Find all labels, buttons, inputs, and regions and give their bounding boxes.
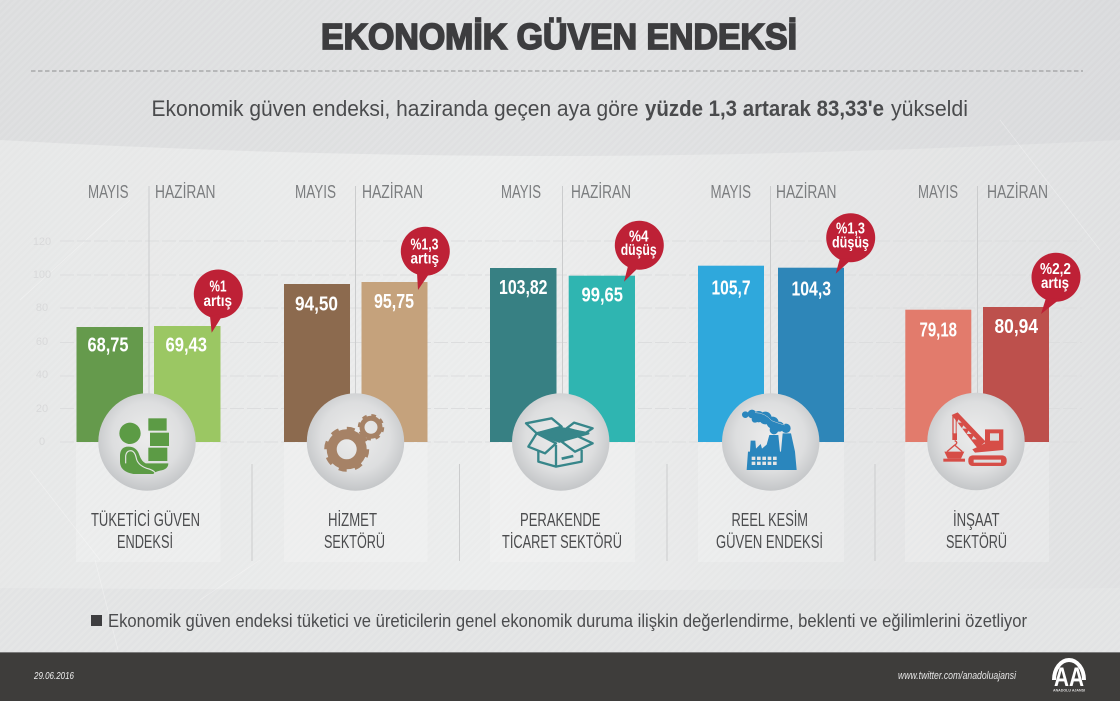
icon: factory <box>722 393 819 491</box>
category label: ENDEKSİ <box>117 532 173 552</box>
subtitle <box>152 96 968 121</box>
category label: SEKTÖRÜ <box>324 532 385 552</box>
column headers <box>918 182 1048 202</box>
y axis labels: 120 <box>33 236 51 248</box>
category label: TİCARET SEKTÖRÜ <box>502 532 622 552</box>
bar: mayıs 68,75 <box>76 327 143 442</box>
category label <box>324 510 385 552</box>
bar: mayıs 105,7: 105,7 <box>712 277 750 299</box>
callout: %1,3 artış: %1,3 <box>410 236 439 253</box>
callout: %2,2 artış <box>1032 253 1080 314</box>
title: EKONOMİK GÜVEN ENDEKSİ <box>321 16 797 57</box>
logo: anadolu ajansı: ANADOLU AJANSI <box>1053 688 1085 692</box>
bar: haziran 99,65 <box>569 276 635 442</box>
panel: hizmet sektörü <box>284 182 450 552</box>
bar: haziran 69,43 <box>154 326 220 442</box>
column headers <box>295 182 423 202</box>
y axis labels <box>33 236 51 448</box>
column headers: MAYIS <box>918 182 958 202</box>
panel: inşaat sektörü <box>905 182 1080 552</box>
bar: mayıs 105,7 <box>698 266 764 442</box>
category label: GÜVEN ENDEKSİ <box>716 532 823 552</box>
bottom note: Ekonomik güven endeksi tüketici ve üreticilerin genel ekonomik duruma ilişkin değerlendirme, beklenti ve eğilimlerini özetliyor <box>108 611 1027 631</box>
logo: anadolu ajansı: AA <box>1054 662 1084 692</box>
bar: haziran 104,3 <box>778 268 844 442</box>
column headers: HAZİRAN <box>776 182 836 202</box>
bar: haziran 95,75 <box>362 282 428 442</box>
callout: %1 artış: %1 <box>210 279 227 296</box>
column headers: MAYIS <box>710 182 751 202</box>
callout: %4 düşüş: düşüş <box>621 242 657 259</box>
bar: haziran 104,3: 104,3 <box>792 279 831 301</box>
subtitle: yüzde 1,3 artarak 83,33'e <box>645 96 884 121</box>
callout: %4 düşüş: %4 <box>629 229 649 246</box>
callout: %1,3 düşüş <box>826 213 875 274</box>
bar: haziran 99,65: 99,65 <box>582 285 623 307</box>
panel: perakende ticaret sektörü <box>490 182 664 552</box>
y axis labels: 20 <box>36 403 48 415</box>
bar: mayıs 79,18: 79,18 <box>920 320 957 342</box>
bar: haziran 80,94: 80,94 <box>994 316 1039 338</box>
y axis labels: 80 <box>36 302 48 314</box>
column headers: MAYIS <box>501 182 541 202</box>
bar: haziran 95,75: 95,75 <box>374 291 414 313</box>
category label <box>946 510 1007 552</box>
category label <box>502 510 622 552</box>
subtitle: Ekonomik güven endeksi, haziranda geçen aya göre <box>152 96 638 121</box>
bar: haziran 80,94 <box>983 307 1049 442</box>
category label <box>91 510 200 552</box>
y axis labels: 60 <box>36 336 48 348</box>
column headers: HAZİRAN <box>155 182 216 202</box>
callout: %4 düşüş <box>615 221 664 282</box>
y axis labels: 40 <box>36 369 48 381</box>
callout: %1,3 düşüş: %1,3 <box>836 221 865 238</box>
y axis labels: 100 <box>33 269 51 281</box>
callout: %1 artış: artış <box>204 293 232 310</box>
icon: crane <box>927 393 1025 490</box>
callout: %1,3 artış: artış <box>410 250 439 267</box>
category label: REEL KESİM <box>732 510 808 530</box>
icon: gears <box>307 393 404 491</box>
bar: mayıs 103,82 <box>490 268 556 442</box>
bar: mayıs 94,50 <box>284 284 350 442</box>
column headers <box>710 182 836 202</box>
category label <box>716 510 823 552</box>
category label: SEKTÖRÜ <box>946 532 1007 552</box>
category label: TÜKETİCİ GÜVEN <box>91 510 200 530</box>
y axis labels: 0 <box>39 436 45 448</box>
bar: mayıs 68,75: 68,75 <box>88 335 128 357</box>
column headers: MAYIS <box>88 182 128 202</box>
callout: %2,2 artış: artış <box>1041 275 1069 292</box>
icon: person carrying boxes <box>98 393 196 491</box>
callout: %1,3 düşüş: düşüş <box>832 235 869 252</box>
callout: %2,2 artış: %2,2 <box>1040 261 1071 278</box>
source url: www.twitter.com/anadoluajansi <box>898 670 1016 682</box>
callout: %1,3 artış <box>401 227 450 290</box>
category label: İNŞAAT <box>953 510 1000 530</box>
category label: HİZMET <box>328 510 377 530</box>
panel: reel kesim güven endeksi <box>698 182 875 552</box>
column headers <box>501 182 631 202</box>
bar: haziran 69,43: 69,43 <box>166 335 207 357</box>
column headers: HAZİRAN <box>571 182 631 202</box>
bar: mayıs 79,18 <box>905 310 971 442</box>
panel: tüketici güven endeksi <box>76 182 243 552</box>
category label: PERAKENDE <box>520 510 600 530</box>
callout: %1 artış <box>194 270 243 333</box>
column headers: HAZİRAN <box>362 182 423 202</box>
bar: mayıs 103,82: 103,82 <box>499 277 548 299</box>
column headers: MAYIS <box>295 182 336 202</box>
subtitle: yükseldi <box>891 96 968 121</box>
column headers <box>88 182 216 202</box>
footer <box>0 652 1120 701</box>
bar: mayıs 94,50: 94,50 <box>295 294 338 316</box>
icon: open box <box>512 393 609 491</box>
column headers: HAZİRAN <box>987 182 1048 202</box>
date: 29.06.2016 <box>33 670 74 682</box>
